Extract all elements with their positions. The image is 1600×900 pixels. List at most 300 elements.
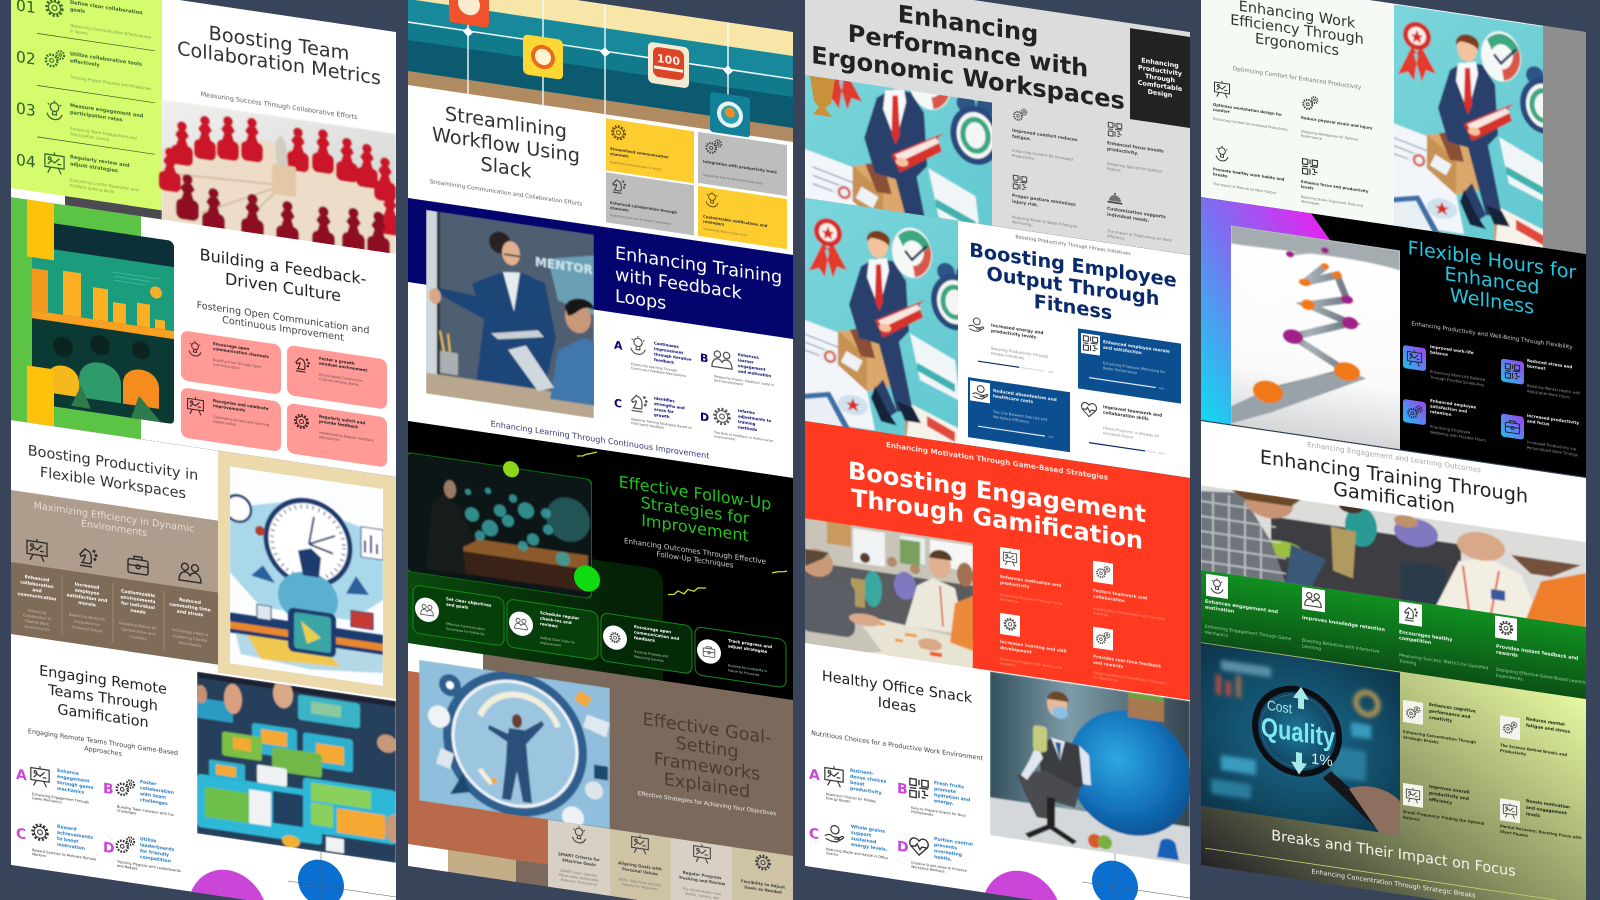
item C: Snacks xyxy=(826,851,838,857)
card: collaboration channels xyxy=(606,172,694,235)
heading: Gamification xyxy=(1333,477,1455,518)
benefit column 2: Increased Output xyxy=(71,625,103,634)
illustration: businessman reading xyxy=(1394,4,1543,248)
card: open communication xyxy=(181,330,281,395)
item: satisfaction xyxy=(1403,394,1486,443)
item C: Whole grains xyxy=(851,824,885,835)
icon: gear xyxy=(1495,616,1517,641)
benefit column 2: employee xyxy=(75,587,99,597)
icon: qr xyxy=(1013,175,1027,190)
icon: gears tile xyxy=(1403,399,1426,425)
card: morale: Enhanced employee morale xyxy=(1103,339,1170,355)
item A: improvement xyxy=(654,346,683,355)
item: customization xyxy=(1106,192,1173,248)
icon: qr xyxy=(1081,333,1100,356)
icon: thumbs up xyxy=(1302,587,1325,612)
benefit column 2: morale xyxy=(78,600,96,609)
card: solicit feedback: Implementing Regular Feedback xyxy=(319,431,374,443)
heading: Ergonomic Workspaces xyxy=(811,41,1125,115)
item A: through iterative xyxy=(654,351,692,362)
item: strain: Reduce physical strain and injury xyxy=(1301,115,1373,130)
benefit column 3 xyxy=(119,588,157,643)
icon: team gear xyxy=(47,0,62,17)
decorative squiggles xyxy=(577,449,787,612)
card: progress review: Tracking and Review xyxy=(679,875,725,886)
heading: Flexible Hours for xyxy=(1408,236,1576,284)
item A: boost xyxy=(850,780,865,788)
item B: challenges xyxy=(140,797,168,807)
icon: gear xyxy=(756,855,770,870)
item D: methods xyxy=(738,424,758,432)
icon: qr xyxy=(1108,122,1122,138)
card: SMART criteria xyxy=(548,820,610,896)
panel: Streamlining Workflow Using Slack xyxy=(408,0,793,255)
card: SMART criteria: SMART Criteria for xyxy=(558,851,600,862)
icon: hand xyxy=(970,380,990,403)
item C: Reducing Waste and Hassle in Office xyxy=(826,847,888,860)
step card 1: Effective Communication xyxy=(446,622,485,631)
card: streamlined channels: channels xyxy=(610,152,629,159)
black callout: Design xyxy=(1148,88,1173,99)
item: workstation: Optimize workstation design for xyxy=(1213,102,1282,117)
item: fatigue: fatigue and stress xyxy=(1526,723,1570,735)
item B: B xyxy=(897,781,908,798)
list item 01: Define clear collaboration xyxy=(70,0,143,17)
icon: sun tile xyxy=(523,34,563,80)
item: cognitive: Enhancing Concentration Through xyxy=(1403,729,1476,745)
item C: support xyxy=(851,830,872,839)
card: energy: 78% xyxy=(1048,369,1054,374)
icon: bulb xyxy=(1216,145,1228,162)
item D: Tracking Progress with Leaderboards xyxy=(116,860,181,873)
card: solicit feedback: provide feedback xyxy=(319,419,358,429)
item: feedback: Provides real-time feedback xyxy=(1093,654,1161,670)
list item 04: adjust strategies xyxy=(70,161,118,174)
icon: people on board xyxy=(1503,802,1517,819)
item: cognitive: performance and xyxy=(1429,708,1470,720)
step card 1: and goals xyxy=(446,602,469,610)
illustration: man conducting goals wheel xyxy=(419,660,610,829)
illustration: zig-zag journey xyxy=(1231,226,1400,450)
heading: Setting xyxy=(676,734,738,763)
card: aligning goals xyxy=(610,829,671,900)
list item 02: 02 xyxy=(16,48,36,69)
step card 4: Follow-Up Processes xyxy=(728,668,760,677)
benefit column 4: and stress xyxy=(177,609,204,618)
icon: orange tile xyxy=(449,0,489,28)
item A: Enhancing Learning Through xyxy=(631,362,677,373)
card: open communication: communication channels xyxy=(213,346,269,359)
item: work-life balance: balance xyxy=(1430,349,1448,357)
decorative blue circle xyxy=(298,856,344,900)
card: absenteeism: 70% xyxy=(1048,434,1054,439)
item: posture: injury risk. xyxy=(1012,199,1039,209)
item D: Creative Snack Ideas to Enhance xyxy=(911,861,967,873)
subheading: Measuring Success Through Collaborative Efforts xyxy=(201,90,358,121)
heading: Through Gamification xyxy=(851,484,1143,555)
benefit column 3: Optimal Focus and xyxy=(121,627,155,636)
photo: game boards on table xyxy=(197,672,396,863)
panel: Enhancing Training Through Gamification xyxy=(1201,421,1588,701)
item: satisfaction: Wellbeing with Flexible Hours xyxy=(1430,429,1486,443)
benefit column 4: commuting time xyxy=(169,601,211,614)
item A: engagement xyxy=(57,774,90,785)
item: teamwork: collaboration xyxy=(1093,594,1125,604)
card: morale: Enhancing Employee Well-being for xyxy=(1103,361,1165,374)
item C: strengths and xyxy=(654,401,685,410)
benefit card 3: Measuring Success: Metrics for Gamified xyxy=(1399,652,1488,672)
item: satisfaction: Enhanced employee xyxy=(1430,398,1476,410)
item: learning: Analytics xyxy=(1000,661,1016,668)
benefit column 3: Designing Spaces for xyxy=(119,621,157,631)
benefit card 1: Mechanics xyxy=(1205,630,1229,639)
item: feedback: for Workplaces xyxy=(1093,675,1118,683)
card: growth mindset: Foster a growth xyxy=(319,356,355,366)
top caption: Boosting Productivity Through Fitness Initiatives xyxy=(1015,234,1131,257)
item: comfort: Productivity xyxy=(1012,154,1035,161)
card: flexibility xyxy=(732,847,793,900)
heading: Improvement xyxy=(641,511,749,545)
item B: B xyxy=(103,781,114,798)
icon: gears xyxy=(117,778,134,797)
item: posture: Well-being xyxy=(1012,220,1032,227)
item D: D xyxy=(897,839,909,856)
card: open communication: Building Trust Through Open xyxy=(213,358,261,369)
icon: gears xyxy=(117,835,134,854)
benefit column 4: Supporting Flexible xyxy=(173,634,208,643)
icon: heart xyxy=(1081,402,1097,418)
panel: Enhancing Performance with Ergonomic Workspaces xyxy=(776,0,1190,375)
step card 2 xyxy=(507,599,598,660)
heading: Boosting Productivity in xyxy=(28,443,198,484)
item: focus xyxy=(1501,409,1579,457)
card: SMART criteria: Measurable, Achievable, xyxy=(559,873,599,883)
item C: Reward Systems to Motivate Remote xyxy=(32,848,96,862)
card: flexibility: Goals as Needed xyxy=(744,884,782,895)
heading: with Feedback xyxy=(615,265,742,304)
list item 03: participation rates xyxy=(70,110,122,123)
item: fatigue: Reduces mental xyxy=(1526,716,1565,728)
item: habits: Promote healthy work habits and xyxy=(1213,166,1285,182)
item D: Utilize xyxy=(140,836,156,845)
subheading: Follow-Up Techniques xyxy=(656,549,734,570)
heading: Enhancing Training xyxy=(615,244,782,288)
card: celebrate improvements: Opportunities xyxy=(213,419,236,427)
icon: knight xyxy=(613,179,625,194)
subheading: Optimizing Comfort for Enhanced Productivity xyxy=(1233,66,1362,91)
item: habits: The Impact of Posture on Work Output xyxy=(1212,182,1277,195)
icon: case tile xyxy=(1501,413,1524,440)
item D: competition xyxy=(140,854,171,865)
step card 3: communication and xyxy=(634,629,679,641)
benefit column 3: environments xyxy=(121,594,156,605)
card: morale: 94% xyxy=(1159,386,1165,391)
item D: Workplace Wellness xyxy=(911,865,945,874)
panel: Enhancing Training with Feedback Loops xyxy=(408,198,793,478)
heading: Healthy Office Snack xyxy=(822,669,973,707)
item: workstation xyxy=(1213,80,1288,132)
heading: Engaging Remote xyxy=(39,663,167,698)
step card 2: reviews xyxy=(540,621,558,629)
item B: Fresh fruits xyxy=(934,780,964,791)
item C: motivation xyxy=(57,842,85,852)
icon: bulb xyxy=(47,99,62,121)
photo: magnifier Cost Quality 1% xyxy=(1201,643,1400,836)
item A: feedback xyxy=(654,357,674,365)
item: satisfaction: Prioritizing Employee xyxy=(1430,424,1471,435)
card: notifications xyxy=(698,186,787,249)
decorative green circle xyxy=(574,564,600,593)
item: workstation: Enhancing Comfort for Increased Productivity xyxy=(1213,117,1288,132)
item: productivity: productivity and xyxy=(1429,790,1469,802)
benefit column 2: Increased xyxy=(75,581,99,591)
item C: Adapting Training Strategies Based on xyxy=(631,417,692,430)
card: teamwork: Increased Output xyxy=(1103,431,1134,440)
step card 2: Schedule regular xyxy=(540,610,580,621)
item B: and motivation xyxy=(738,368,771,378)
list item 04: Problem-Solving Skills xyxy=(70,183,114,194)
benefit card 1: motivation xyxy=(1205,605,1235,615)
item: productivity: Improves overall xyxy=(1429,784,1470,796)
benefit card 3: Encourages healthy xyxy=(1399,629,1453,643)
item B: learner xyxy=(738,357,754,365)
item A: productivity. xyxy=(850,786,883,797)
icon: gears xyxy=(46,49,64,68)
item D xyxy=(897,831,973,878)
benefit column 4: Work Models xyxy=(179,641,202,648)
card: energy: productivity levels xyxy=(991,328,1036,341)
item: productivity: Break Frequency: Finding the Optimal xyxy=(1403,809,1484,826)
benefit card 2: Learning xyxy=(1302,643,1321,652)
list item 01 xyxy=(17,0,152,39)
photo: mentor with tablet xyxy=(426,210,594,418)
item D: Portion control xyxy=(934,836,973,848)
heading: Effective Follow-Up xyxy=(619,472,771,514)
list item 02: effectively xyxy=(70,58,100,69)
card: collaboration channels: Enhanced collaboration through xyxy=(610,201,677,215)
caption: Enhancing Learning Through Continuous Improvement xyxy=(491,419,709,461)
list item 03 xyxy=(17,100,143,141)
photo: man on exercise ball xyxy=(990,671,1190,865)
subheading: Approaches xyxy=(84,744,122,758)
benefit card 4 xyxy=(1490,613,1588,701)
item B: energy. xyxy=(934,798,954,807)
decorative purple blob xyxy=(188,864,268,900)
card: teamwork: Improved teamwork and xyxy=(1103,404,1162,419)
benefit card 1: Enhances engagement and xyxy=(1205,599,1279,615)
item D: and Badges xyxy=(117,864,138,871)
panel: Boosting Employee Output Through Fitness xyxy=(765,172,1190,535)
black callout: Comfortable xyxy=(1138,79,1183,93)
panel: Building a Feedback-Driven Culture xyxy=(11,197,396,477)
benefit column 1 xyxy=(18,573,56,633)
icon: document xyxy=(968,317,984,332)
heading: Enhancing Training Through xyxy=(1260,445,1528,508)
icon: knight xyxy=(296,357,309,373)
item: customization: individual needs. xyxy=(1107,212,1150,224)
card: aligning goals: Personal Values xyxy=(622,866,659,877)
heading: Performance with xyxy=(848,19,1088,83)
illustration: man facing clock xyxy=(230,466,383,686)
heading: Enhanced xyxy=(1445,262,1539,299)
card: growth mindset: Criticism Among Teams xyxy=(319,377,359,387)
icon: gear stack xyxy=(706,139,721,154)
photo: mentor with tablet: MENTOR T xyxy=(535,255,606,279)
item: focus: Enhanced focus boosts xyxy=(1107,140,1164,155)
icon: board xyxy=(188,396,203,416)
step card 3 xyxy=(601,613,692,674)
card: progress review: The GROW Model: Goal, xyxy=(681,886,722,896)
item C: growth xyxy=(654,412,670,419)
list item 04: Evaluating Conflict Resolution and xyxy=(70,177,139,192)
heading: Gamification xyxy=(57,702,149,731)
card: streamlined channels: Streamlined communication xyxy=(610,147,669,160)
item D: D xyxy=(103,840,115,857)
heading: Explained xyxy=(664,770,750,803)
icon: gear doc xyxy=(825,765,843,788)
list item 04: Regularly review and xyxy=(70,154,130,169)
card: celebrate improvements: Celebrating Growth and Learning xyxy=(213,415,269,427)
item: stress: Adjustable Work Hours xyxy=(1527,388,1570,400)
item: focus xyxy=(1300,158,1369,213)
item: focus xyxy=(1107,122,1164,179)
heading: Ideas xyxy=(878,695,916,716)
step card 2: Improvement xyxy=(540,641,562,648)
item B: promote xyxy=(934,786,956,795)
benefit column 2 xyxy=(67,580,107,634)
step card 2: check-ins and xyxy=(540,616,572,625)
subheading: Enhancing Productivity and Well-Being Through Flexibility xyxy=(1411,321,1573,351)
card: collaboration channels: Organizing Channels for Better Cooperation xyxy=(610,213,671,226)
item C: energy levels. xyxy=(851,842,888,853)
panel: Effective Goal-Setting Frameworks xyxy=(408,643,793,900)
top caption: Enhancing Engagement and Learning Outcomes xyxy=(1307,440,1481,474)
item B xyxy=(700,346,774,391)
icon: gears xyxy=(1097,565,1110,578)
item: cognitive xyxy=(1403,698,1476,750)
item D: prevents xyxy=(934,842,957,852)
icon: board xyxy=(1214,80,1230,98)
item: customization: Efficiency xyxy=(1107,234,1126,241)
item: focus: Increased productivity xyxy=(1527,413,1579,425)
card: teamwork: 85% xyxy=(1159,451,1165,456)
item C: Workers xyxy=(32,852,46,858)
step card 3: Encourage open xyxy=(634,624,671,634)
item A: Continuous Feedback Mechanisms xyxy=(631,366,686,378)
photo: team playing table game xyxy=(805,518,973,668)
black callout xyxy=(1130,28,1190,128)
item: cognitive: Strategic Breaks xyxy=(1403,734,1439,745)
item: focus: Enhance focus and productivity xyxy=(1301,179,1369,194)
item C: C xyxy=(809,826,819,843)
item D: for friendly xyxy=(140,848,169,858)
step card 1: Techniques for Follow-Up xyxy=(445,626,484,636)
item C: achievements xyxy=(57,830,93,841)
benefit card 4: Experiences xyxy=(1496,673,1523,683)
item C xyxy=(614,390,692,434)
item: focus: Posture xyxy=(1107,167,1122,173)
card: growth mindset: Encouraging Constructive xyxy=(319,373,363,383)
heading: Teams Through xyxy=(47,682,158,715)
icon: knight xyxy=(632,395,647,413)
heading: Output Through xyxy=(987,262,1159,310)
card: SMART criteria: Effective Goals xyxy=(562,857,596,867)
item: teamwork: Fosters teamwork and xyxy=(1093,588,1147,602)
black callout: Productivity xyxy=(1138,63,1183,78)
list item 02: Tracking Project Progress and Milestones xyxy=(69,74,151,91)
benefit column 3: needs xyxy=(130,608,146,616)
item: fatigue xyxy=(1500,712,1570,763)
card: teamwork: Fitness Programs: A Strategy for xyxy=(1103,426,1160,439)
benefit card 1: Enhancing Engagement Through Game xyxy=(1205,624,1292,642)
item C: C xyxy=(614,397,622,411)
card: energy: Boosting Productivity Through xyxy=(991,346,1049,359)
item: focus: productivity. xyxy=(1107,146,1139,157)
heading: Effective Goal- xyxy=(643,710,771,749)
heading: Boosting Team xyxy=(209,21,349,65)
card: absenteeism: Workplace Efficiency xyxy=(993,415,1029,424)
card: streamlined channels: Organizing Communication in Teams xyxy=(610,160,662,172)
item A: A xyxy=(614,339,623,353)
photo: magnifier Cost Quality 1%: 1% xyxy=(1311,750,1333,770)
item: feedback: Designing Effective Gamification Strategies xyxy=(1093,671,1167,686)
icon: gears xyxy=(1303,95,1318,110)
subheading: Environments xyxy=(81,518,147,539)
item: posture: Reducing Strain to Boost Employee xyxy=(1012,215,1078,229)
item: motivation: Enhances motivation and xyxy=(1000,574,1061,589)
item B: Professionals xyxy=(911,810,933,817)
list item 04: 04 xyxy=(16,151,36,172)
list item 02 xyxy=(17,50,151,90)
panel: Boosting Productivity in Flexible Workspaces xyxy=(11,420,396,700)
card: SMART criteria: SMART Goals: Specific, xyxy=(560,869,598,878)
item B: B xyxy=(700,351,708,365)
item: focus: Techniques xyxy=(1300,199,1319,206)
benefit column 3: Customizable xyxy=(121,588,155,599)
subheading: Maximizing Efficiency in Dynamic xyxy=(34,500,194,535)
list item 03: Analyzing Team Engagement and xyxy=(70,126,137,141)
card: progress review: Regular Progress xyxy=(683,870,722,880)
item: motivation: Short Pauses xyxy=(1500,829,1529,838)
item: work-life balance: Improved work-life xyxy=(1430,344,1474,355)
black callout: Through xyxy=(1145,72,1175,85)
item: teamwork: Building Team Collaboration with Gamified xyxy=(1093,607,1165,621)
item: fatigue: The Science Behind Breaks and xyxy=(1500,742,1567,757)
item: motivation: Enhancing Motivation Through Game xyxy=(1000,593,1063,606)
list item 04 xyxy=(17,152,138,194)
icon: gears xyxy=(1504,721,1517,734)
benefit column 1: Collaboration in xyxy=(23,613,51,621)
card: teamwork xyxy=(1081,401,1165,456)
card: solicit feedback: Regularly solicit and xyxy=(319,414,365,425)
item B: hydration and xyxy=(934,792,970,803)
card: progress review xyxy=(671,838,732,900)
list item 01: goals xyxy=(70,7,85,15)
benefit column 2: Balancing Work-Life xyxy=(69,613,106,622)
card: integration tools: Integrating Tools for Enhanced Productivity xyxy=(703,173,763,186)
card: celebrate improvements: Recognize and celebrate xyxy=(213,398,269,411)
item: satisfaction: satisfaction and xyxy=(1430,403,1467,414)
icon: qr tile xyxy=(1501,358,1524,385)
item A: Nutrient- xyxy=(850,768,874,777)
item: motivation: levels xyxy=(1526,811,1541,819)
heading: Collaboration Metrics xyxy=(177,37,381,90)
item C: Identifies xyxy=(654,395,675,404)
icon: heart xyxy=(910,837,928,856)
heading: Streamlining xyxy=(445,102,567,143)
item B: Measuring Impact: Feedback Loops in xyxy=(714,374,774,387)
card: open communication: Encourage open xyxy=(213,341,249,351)
